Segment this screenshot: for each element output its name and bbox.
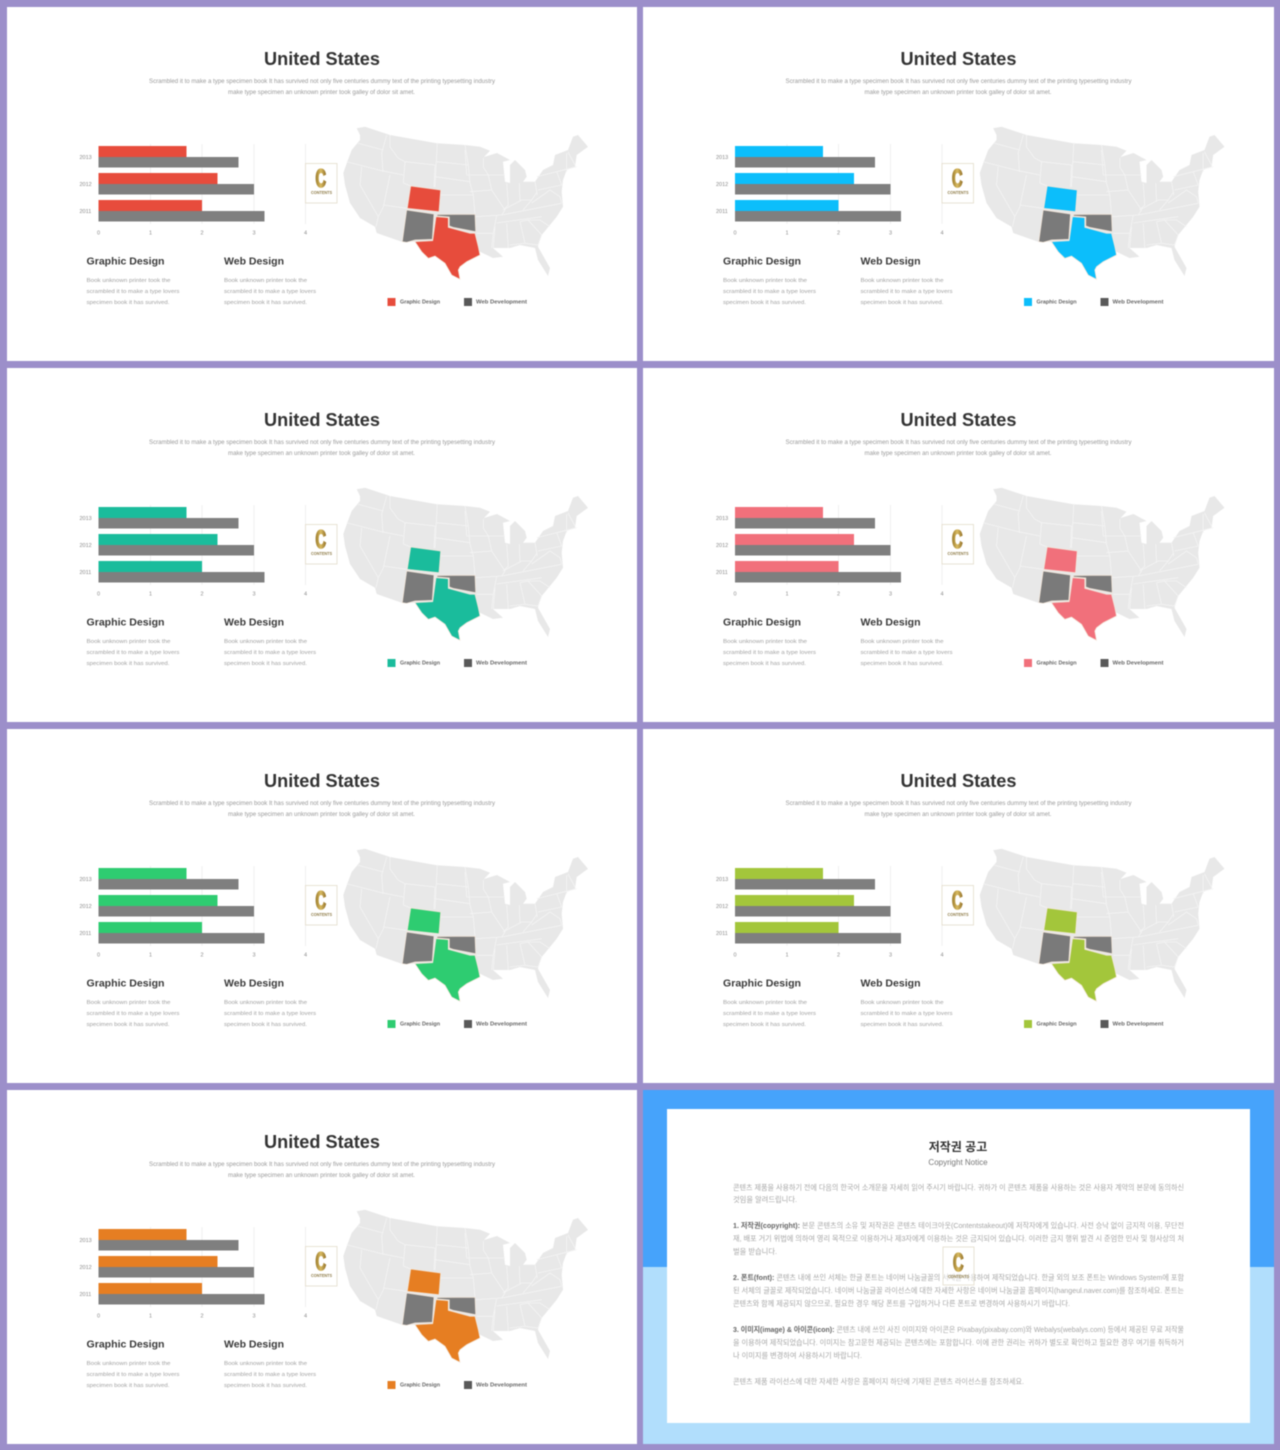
text block: web design <box>860 616 953 667</box>
bar chart: 4 <box>940 952 944 958</box>
text block: web design: specimen book it has survived. <box>224 661 307 667</box>
bar chart: 2013 <box>80 877 92 883</box>
text block: graphic design <box>723 978 816 1028</box>
text block: graphic design: specimen book it has survived. <box>86 1022 170 1028</box>
intro text <box>786 78 1132 96</box>
legend: Graphic Design <box>400 1022 440 1028</box>
text block: web design <box>224 256 316 306</box>
text block: web design: scrambled it to make a type lovers <box>224 650 316 656</box>
text block: web design: Book unknown printer took the <box>860 639 944 645</box>
legend: Web Development <box>476 660 527 666</box>
legend <box>1024 659 1164 667</box>
text block: web design: Book unknown printer took the <box>860 278 944 284</box>
bar chart: 3 <box>252 592 256 598</box>
notice intro <box>733 1183 1184 1204</box>
panel: teal slide <box>7 368 637 722</box>
text block: graphic design: specimen book it has survived. <box>86 300 170 306</box>
map <box>343 1210 588 1362</box>
bar chart: 1 <box>149 1314 152 1320</box>
bar chart: 2 <box>837 230 840 236</box>
text block: graphic design: Book unknown printer took the <box>723 1000 807 1006</box>
map <box>980 849 1224 1001</box>
text block: graphic design: Book unknown printer took the <box>86 278 170 284</box>
logo: CONTENTS <box>311 912 332 917</box>
logo <box>306 524 337 564</box>
text block: web design: Book unknown printer took the <box>224 639 307 645</box>
legend <box>388 298 527 306</box>
legend <box>388 1020 527 1028</box>
notice intro: 것임을 알려드립니다. <box>733 1195 797 1204</box>
text block: web design: scrambled it to make a type lovers <box>224 1372 316 1378</box>
text block: graphic design: Graphic Design <box>723 256 801 268</box>
text block: graphic design <box>723 256 816 306</box>
bar chart: 3 <box>252 952 256 958</box>
bar chart: 3 <box>889 230 892 236</box>
logo <box>943 1247 974 1285</box>
bar chart: 2011 <box>80 209 91 215</box>
text block: graphic design <box>86 256 180 306</box>
notice heading: 저작권 공고 <box>929 1139 987 1154</box>
bar chart: 0 <box>97 592 100 598</box>
bar chart: 0 <box>97 230 100 236</box>
title: United States <box>264 1132 380 1152</box>
notice section 2: 2. 폰트(font): 콘텐츠 내에 쓰인 서체는 한글 폰트는 네이버 나눔글꼴의 서체를 사용하여 제작되었습니다. 한글 외의 보조 폰트는 Windows System에 포함 <box>733 1273 1184 1282</box>
bar chart <box>716 144 944 236</box>
panel: copyright notice <box>643 1090 1274 1444</box>
logo <box>942 886 974 925</box>
bar chart: 2011 <box>716 209 728 215</box>
logo <box>306 886 337 925</box>
notice section 1: 1. 저작권(copyright): 본문 콘텐츠의 소유 및 저작권은 콘텐츠 테이크아웃(Contentstakeout)에 저작자에게 있습니다. 사전 승낙 없이 금지적 이용, 무단전 <box>733 1221 1184 1230</box>
notice section 2 <box>733 1273 1184 1308</box>
bar chart: 4 <box>304 1314 307 1320</box>
bar chart: 0 <box>734 952 737 958</box>
intro text: Scrambled it to make a type specimen book It has survived not only five centuries dummy text of the printing typesetting industry <box>149 800 496 807</box>
intro text: Scrambled it to make a type specimen book It has survived not only five centuries dummy text of the printing typesetting industry <box>786 800 1132 807</box>
bar chart: 0 <box>734 230 737 236</box>
logo: CONTENTS <box>311 1273 332 1278</box>
bar chart: 2013 <box>716 155 728 161</box>
panel: green slide <box>7 729 637 1083</box>
intro text <box>149 800 496 818</box>
text block: web design: scrambled it to make a type lovers <box>860 1011 953 1017</box>
text block: web design: scrambled it to make a type lovers <box>224 1011 316 1017</box>
intro text: Scrambled it to make a type specimen book It has survived not only five centuries dummy text of the printing typesetting industry <box>149 78 496 85</box>
title: United States <box>900 49 1016 69</box>
logo: C <box>316 165 326 193</box>
legend: Web Development <box>1112 660 1164 666</box>
text block: graphic design <box>86 978 180 1028</box>
bar chart: 2013 <box>716 877 728 883</box>
text block: web design <box>224 978 316 1028</box>
bar chart: 1 <box>786 952 789 958</box>
legend: Web Development <box>476 1022 527 1028</box>
bar chart: 2013 <box>80 516 92 522</box>
notice intro: 콘텐츠 제품을 사용하기 전에 다음의 한국어 소개문을 자세히 읽어 주시기 바랍니다. 귀하가 이 콘텐츠 제품을 사용하는 것은 사용자 계약의 본문에 동의하신 <box>733 1183 1184 1192</box>
bar chart: 3 <box>252 230 256 236</box>
bar chart: 4 <box>940 230 944 236</box>
intro text <box>786 439 1132 457</box>
legend <box>388 659 527 667</box>
text block: web design: Web Design <box>224 978 284 990</box>
text block: graphic design: scrambled it to make a type lovers <box>723 289 816 295</box>
intro text: make type specimen an unknown printer took galley of dolor sit amet. <box>864 89 1052 96</box>
text block: web design: specimen book it has survived. <box>860 300 944 306</box>
intro text: make type specimen an unknown printer took galley of dolor sit amet. <box>228 450 415 457</box>
text block: graphic design: Graphic Design <box>723 616 801 628</box>
title: United States <box>264 771 380 791</box>
intro text: make type specimen an unknown printer took galley of dolor sit amet. <box>228 811 415 818</box>
text block: graphic design: Book unknown printer took the <box>86 1361 170 1367</box>
title: United States <box>900 410 1016 430</box>
text block: web design: scrambled it to make a type lovers <box>860 289 953 295</box>
bar chart <box>80 866 307 958</box>
logo: C <box>952 526 962 554</box>
bar chart: 2012 <box>716 904 728 910</box>
text block: web design <box>224 1338 316 1389</box>
text block: graphic design: Book unknown printer took the <box>723 639 807 645</box>
text block: graphic design: specimen book it has survived. <box>86 1383 170 1389</box>
text block: graphic design: specimen book it has survived. <box>723 1022 806 1028</box>
text block: graphic design <box>86 616 180 667</box>
intro text <box>149 78 496 96</box>
text block: graphic design: Graphic Design <box>723 978 801 990</box>
notice section 3: 3. 이미지(image) & 아이콘(icon): 콘텐츠 내에 쓰인 사진 이미지와 아이콘은 Pixabay(pixabay.com)와 Webalys(webalys.com) 등에서 제공된 무료 저작물 <box>733 1325 1184 1334</box>
text block: graphic design: scrambled it to make a type lovers <box>86 289 180 295</box>
intro text: make type specimen an unknown printer took galley of dolor sit amet. <box>228 1172 415 1179</box>
text block: graphic design: Book unknown printer took the <box>86 639 170 645</box>
legend: Graphic Design <box>400 300 440 306</box>
bar chart: 2011 <box>80 570 91 576</box>
bar chart: 2011 <box>716 570 728 576</box>
text block: web design: Web Design <box>224 616 284 628</box>
logo: CONTENTS <box>948 1274 969 1279</box>
notice closing: 콘텐츠 제품 라이선스에 대한 자세한 사항은 홈페이지 하단에 기재된 콘텐츠 라이선스를 참조하세요. <box>733 1377 1024 1386</box>
bar chart: 2011 <box>716 931 728 937</box>
text block: web design: specimen book it has survived. <box>224 300 307 306</box>
legend: Graphic Design <box>1036 1022 1076 1028</box>
notice section 3 <box>733 1325 1184 1360</box>
logo <box>942 164 974 203</box>
logo: C <box>316 526 326 554</box>
bar chart: 2012 <box>716 543 728 549</box>
bar chart: 1 <box>786 592 789 598</box>
intro text <box>786 800 1132 818</box>
logo: CONTENTS <box>948 190 969 195</box>
bar chart: 1 <box>149 230 152 236</box>
text block: web design: Web Design <box>860 616 920 628</box>
logo: CONTENTS <box>311 551 332 556</box>
text block: graphic design: scrambled it to make a type lovers <box>86 1372 180 1378</box>
text block: graphic design: Book unknown printer took the <box>723 278 807 284</box>
bar chart: 2013 <box>716 516 728 522</box>
bar chart: 0 <box>97 952 100 958</box>
logo <box>942 524 974 564</box>
text block: web design: Book unknown printer took the <box>224 1000 307 1006</box>
logo: C <box>316 887 326 915</box>
text block: web design <box>860 978 953 1028</box>
text block: web design <box>860 256 953 306</box>
text block: graphic design: Graphic Design <box>86 616 164 628</box>
text block: web design: scrambled it to make a type lovers <box>860 650 953 656</box>
bar chart: 2 <box>200 1314 204 1320</box>
panel: cyan slide <box>643 7 1274 361</box>
bar chart <box>80 144 307 236</box>
text block: graphic design: specimen book it has survived. <box>86 661 170 667</box>
logo: CONTENTS <box>948 551 969 556</box>
text block: graphic design <box>86 1338 180 1389</box>
bar chart: 2013 <box>80 1238 92 1244</box>
map <box>343 849 588 1001</box>
map <box>980 488 1224 640</box>
bar chart: 2011 <box>80 1292 91 1298</box>
legend: Web Development <box>1112 1022 1164 1028</box>
legend: Graphic Design <box>1036 300 1076 306</box>
legend: Web Development <box>1112 300 1164 306</box>
title: United States <box>264 49 380 69</box>
notice section 2: 된 서체의 글꼴로 제작되었습니다. 네이버 나눔글꼴 라이선스에 대한 자세한 사항은 네이버 나눔글꼴 홈페이지(hangeul.naver.com)를 참조하세요. 폰트는 <box>733 1286 1184 1295</box>
text block: web design: specimen book it has survived. <box>860 661 944 667</box>
bar chart <box>716 866 944 958</box>
text block: web design: Web Design <box>860 256 920 268</box>
bar chart: 1 <box>786 230 789 236</box>
intro text: make type specimen an unknown printer took galley of dolor sit amet. <box>864 811 1052 818</box>
map <box>343 488 588 640</box>
text block: graphic design: scrambled it to make a type lovers <box>723 650 816 656</box>
bar chart: 4 <box>304 952 307 958</box>
text block: graphic design: scrambled it to make a type lovers <box>723 1011 816 1017</box>
map <box>343 127 588 279</box>
legend <box>1024 298 1164 306</box>
intro text: make type specimen an unknown printer took galley of dolor sit amet. <box>864 450 1052 457</box>
text block: web design <box>224 616 316 667</box>
intro text <box>149 1161 496 1179</box>
intro text: Scrambled it to make a type specimen book It has survived not only five centuries dummy text of the printing typesetting industry <box>149 439 496 446</box>
bar chart: 3 <box>889 592 892 598</box>
panel: pink slide <box>643 368 1274 722</box>
logo: C <box>316 1248 326 1276</box>
legend: Web Development <box>476 1382 527 1388</box>
notice section 1 <box>733 1221 1184 1256</box>
bar chart: 4 <box>304 230 307 236</box>
bar chart: 2012 <box>80 182 92 188</box>
text block: web design: Web Design <box>860 978 920 990</box>
bar chart: 4 <box>304 592 307 598</box>
text block: web design: specimen book it has survived. <box>224 1022 307 1028</box>
bar chart: 2011 <box>80 931 91 937</box>
text block: graphic design: Book unknown printer took the <box>86 1000 170 1006</box>
bar chart: 3 <box>252 1314 256 1320</box>
logo: CONTENTS <box>311 190 332 195</box>
title: United States <box>264 410 380 430</box>
intro text: Scrambled it to make a type specimen book It has survived not only five centuries dummy text of the printing typesetting industry <box>149 1161 496 1168</box>
text block: web design: Book unknown printer took the <box>224 278 307 284</box>
text block: graphic design: scrambled it to make a type lovers <box>86 1011 180 1017</box>
notice section 3: 을 이용하여 제작되었습니다. 이미지는 참고문헌 제공되는 콘텐츠에는 포함합니다. 이에 관한 권리는 귀하가 별도로 확인하고 필요한 경우 여기를 취득하거 <box>733 1338 1184 1347</box>
intro text <box>149 439 496 457</box>
text block: web design: Web Design <box>224 1338 284 1350</box>
bar chart: 2 <box>837 952 840 958</box>
text block: graphic design: Graphic Design <box>86 256 164 268</box>
text block: web design: Book unknown printer took the <box>860 1000 944 1006</box>
legend: Graphic Design <box>400 660 440 666</box>
bar chart <box>716 505 944 598</box>
text block: graphic design: scrambled it to make a type lovers <box>86 650 180 656</box>
bar chart: 2 <box>200 230 204 236</box>
logo: C <box>952 887 962 915</box>
legend: Web Development <box>476 300 527 306</box>
panel: red slide <box>7 7 637 361</box>
panel: lime slide <box>643 729 1274 1083</box>
bar chart: 0 <box>97 1314 100 1320</box>
logo <box>306 164 337 203</box>
text block: graphic design <box>723 616 816 667</box>
legend <box>388 1381 527 1389</box>
bar chart: 2012 <box>80 1265 92 1271</box>
legend <box>1024 1020 1164 1028</box>
bar chart: 1 <box>149 952 152 958</box>
text block: web design: Book unknown printer took the <box>224 1361 307 1367</box>
bar chart: 2012 <box>80 904 92 910</box>
text block: web design: Web Design <box>224 256 284 268</box>
map <box>980 127 1224 279</box>
bar chart: 2 <box>200 592 204 598</box>
panel: orange slide <box>7 1090 637 1444</box>
bar chart <box>80 1227 307 1320</box>
bar chart: 0 <box>734 592 737 598</box>
intro text: Scrambled it to make a type specimen book It has survived not only five centuries dummy text of the printing typesetting industry <box>786 78 1132 85</box>
bar chart <box>80 505 307 598</box>
legend: Graphic Design <box>1036 660 1076 666</box>
text block: graphic design: specimen book it has survived. <box>723 661 806 667</box>
text block: graphic design: Graphic Design <box>86 978 164 990</box>
bar chart: 1 <box>149 592 152 598</box>
text block: web design: specimen book it has survived. <box>860 1022 944 1028</box>
notice section 1: 벌을 받습니다. <box>733 1247 777 1256</box>
bar chart: 2012 <box>80 543 92 549</box>
title: United States <box>900 771 1016 791</box>
text block: web design: scrambled it to make a type lovers <box>224 289 316 295</box>
logo: CONTENTS <box>948 912 969 917</box>
bar chart: 2 <box>200 952 204 958</box>
bar chart: 2013 <box>80 155 92 161</box>
notice section 3: 나 이미지를 변경하여 사용하시기 바랍니다. <box>733 1351 862 1360</box>
bar chart: 3 <box>889 952 892 958</box>
bar chart: 2 <box>837 592 840 598</box>
text block: graphic design: specimen book it has survived. <box>723 300 806 306</box>
logo: C <box>952 165 962 193</box>
logo: C <box>953 1249 964 1277</box>
text block: graphic design: Graphic Design <box>86 1338 164 1350</box>
intro text: make type specimen an unknown printer took galley of dolor sit amet. <box>228 89 415 96</box>
intro text: Scrambled it to make a type specimen book It has survived not only five centuries dummy text of the printing typesetting industry <box>786 439 1132 446</box>
notice subheading: Copyright Notice <box>928 1158 988 1167</box>
bar chart: 2012 <box>716 182 728 188</box>
logo <box>306 1246 337 1286</box>
notice section 1: 재, 배포 거기 위법에 의하여 영리 목적으로 이용하거나 제3자에게 이용하는 것은 금지되어 있습니다. 이러한 금지 행위 발견 시 준엄한 민사 및 형사상의 처 <box>733 1234 1184 1243</box>
notice section 2: 콘텐츠와 함께 제공되지 않으므로, 필요한 경우 해당 폰트를 구입하거나 다른 폰트로 변경하여 사용하시기 바랍니다. <box>733 1299 1070 1308</box>
legend: Graphic Design <box>400 1382 440 1388</box>
bar chart: 4 <box>940 592 944 598</box>
text block: web design: specimen book it has survived. <box>224 1383 307 1389</box>
